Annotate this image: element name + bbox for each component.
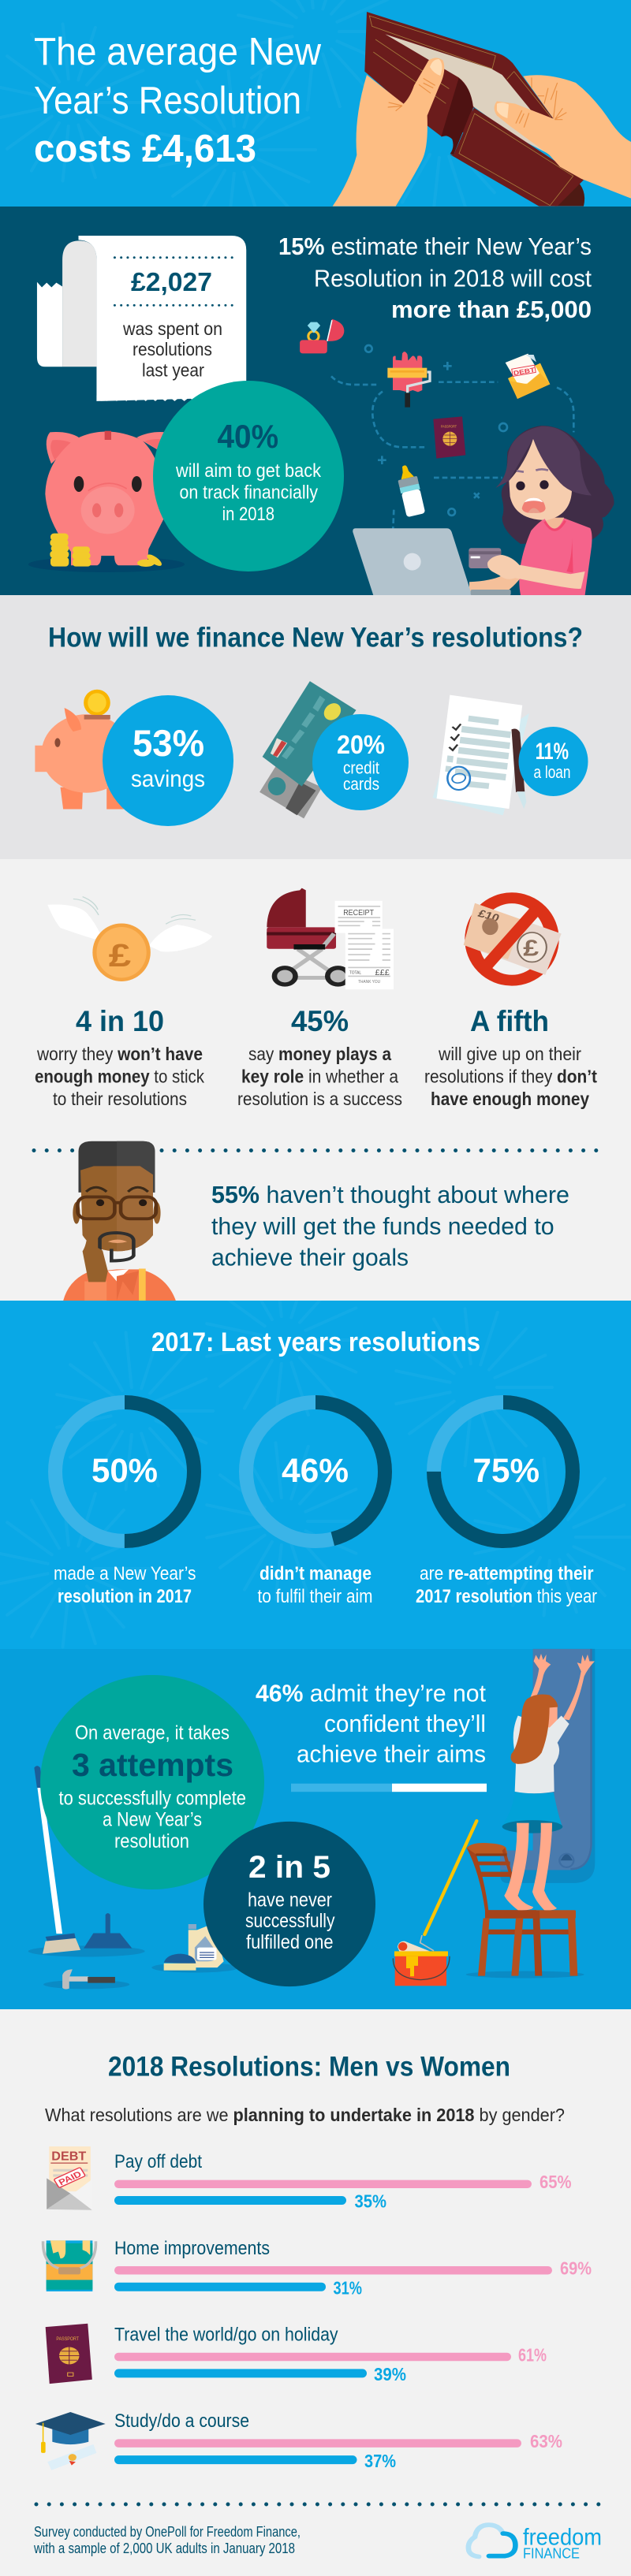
- icon: pram and receipt: £££: [375, 969, 390, 977]
- character: woman on chair hanging wallpaper: [466, 1649, 595, 1978]
- icon: paint roller: [387, 352, 430, 408]
- row: travel: 61%: [518, 2344, 547, 2365]
- callout circle: 2 in 5: have never: [248, 1889, 332, 1912]
- illustration: laptop: [353, 528, 511, 595]
- illustration: broom, dustpan and hammer: [28, 1766, 145, 1990]
- receipt caption: [122, 318, 222, 380]
- callout circle: 3 attempts: resolution: [114, 1830, 189, 1852]
- statistic: 4 in 10: worry they won’t have: [36, 1044, 203, 1064]
- statistic: 4 in 10: 4 in 10: [76, 1005, 164, 1037]
- callout circle: 3 attempts: 3 attempts: [72, 1747, 233, 1783]
- title: The average New: [34, 31, 322, 73]
- statistic: a fifth: have enough money: [431, 1089, 589, 1109]
- panel: attempts and confidence: [0, 1649, 631, 2009]
- statistic: 15% estimate: 15% estimate their New Year’s: [278, 233, 592, 260]
- caption: made a resolution: [54, 1563, 196, 1607]
- callout circle: 11% a loan: 11%: [536, 739, 569, 765]
- icon: no money sign: £: [523, 936, 539, 960]
- statistic: 45%: say money plays a: [248, 1044, 391, 1064]
- icon: no money sign: [464, 898, 562, 981]
- panel: money worries: [0, 859, 631, 1301]
- row: home improvements: [43, 2238, 592, 2298]
- statistic: 15% estimate: more than £5,000: [391, 296, 592, 323]
- statistic: 55% haven't thought about funds: [211, 1181, 569, 1271]
- statistic: 4 in 10: [35, 1005, 204, 1109]
- icon: credit cards: [259, 681, 357, 818]
- statistic: 46% not confident: [256, 1679, 486, 1768]
- statistic: 15% estimate: Resolution in 2018 will cost: [314, 265, 592, 292]
- icon: orange piggy bank with coin: [35, 690, 132, 810]
- icon: baby bottle: [395, 463, 426, 517]
- title: costs £4,613: [34, 128, 256, 170]
- statistic: 45%: resolution is a success: [237, 1089, 402, 1109]
- callout circle: 11% a loan: a loan: [533, 762, 571, 782]
- logo: Freedom Finance: freedom: [523, 2524, 602, 2551]
- source note: with a sample of 2,000 UK adults in January 2018: [33, 2541, 295, 2556]
- title: Year’s Resolution: [34, 80, 301, 122]
- callout circle: 20% credit cards: credit: [343, 758, 379, 778]
- icon: debt letter: DEBT: [513, 367, 536, 377]
- callout circle: 40%: [153, 381, 344, 571]
- icon: loan document and pen: [432, 695, 529, 815]
- callout circle: 3 attempts: [40, 1675, 264, 1889]
- icon: passport: [46, 2324, 92, 2384]
- panel: hero header: [0, 0, 631, 228]
- illustration: receipt: [37, 236, 246, 401]
- icon: passport: PASSPORT: [441, 425, 457, 429]
- donut chart: 75%: [434, 1402, 573, 1541]
- row: study: 63%: [530, 2431, 562, 2451]
- callout circle: 2 in 5: 2 in 5: [248, 1850, 330, 1885]
- icon: pram and receipt: [267, 888, 394, 989]
- source note: Survey conducted by OnePoll for Freedom Finance,: [34, 2524, 301, 2540]
- row: home improvements: Home improvements: [114, 2238, 270, 2259]
- illustration: hands holding an empty wallet: [333, 12, 631, 207]
- callout circle: 2 in 5: [203, 1822, 375, 1986]
- caption: made a resolution: resolution in 2017: [58, 1586, 192, 1607]
- donut chart: 75%: 75%: [473, 1452, 540, 1490]
- icon: debt paid envelope: [47, 2146, 92, 2210]
- icon: no money sign: £10: [476, 908, 501, 925]
- panel: men vs women: [0, 2009, 631, 2576]
- statistic: 55% haven't thought about funds: they will get the funds needed to: [211, 1212, 554, 1240]
- row: study: Study/do a course: [114, 2410, 249, 2432]
- callout circle: 3 attempts: On average, it takes: [75, 1722, 230, 1744]
- panel: 2017 last year's resolutions: [0, 1262, 631, 1649]
- callout circle: 20% credit cards: 20%: [337, 730, 385, 759]
- illustration: pink piggy bank with coins: [28, 431, 185, 572]
- logo: Freedom Finance: [469, 2524, 602, 2562]
- caption: didn't manage: didn’t manage: [259, 1563, 372, 1584]
- icon: debt paid envelope: PAID: [58, 2170, 84, 2187]
- callout circle: 3 attempts: a New Year’s: [103, 1809, 202, 1831]
- statistic: a fifth: A fifth: [470, 1005, 549, 1037]
- icon: ring box: [300, 319, 344, 353]
- statistic: a fifth: resolutions if they don’t: [424, 1066, 597, 1086]
- illustration: cleaning bottle and brush: [151, 1923, 239, 1973]
- receipt figure: £2,027: [131, 267, 212, 296]
- caption: made a resolution: made a New Year’s: [54, 1563, 196, 1584]
- row: travel: Travel the world/go on holiday: [114, 2325, 338, 2346]
- callout circle: 20% credit cards: [312, 714, 409, 810]
- donut chart: 46%: [246, 1402, 385, 1541]
- statistic: 55% haven't thought about funds: achieve their goals: [211, 1244, 409, 1271]
- illustration: paint pot and roller: [393, 1821, 476, 1986]
- statistic: 15% estimate: [278, 233, 592, 323]
- callout circle: 53% savings: savings: [131, 766, 205, 792]
- row: study: [35, 2410, 562, 2471]
- title: [34, 31, 322, 170]
- callout circle: 53% savings: [103, 695, 233, 826]
- statistic: 46% not confident: achieve their aims: [297, 1740, 486, 1768]
- donut chart: 50%: 50%: [91, 1452, 158, 1490]
- icon: paint bucket: [43, 2240, 95, 2291]
- caption: didn't manage: to fulfil their aim: [257, 1586, 372, 1607]
- icon: debt paid envelope: DEBT: [51, 2149, 87, 2163]
- row: home improvements: 69%: [560, 2258, 592, 2279]
- source note: [33, 2524, 301, 2556]
- heading: 2017: Last years resolutions: [151, 1327, 480, 1357]
- callout circle: 2 in 5: successfully: [245, 1910, 335, 1932]
- callout circle: 40%: 40%: [218, 418, 278, 455]
- panel: spending on resolutions: [0, 207, 631, 595]
- caption: re-attempting: are re-attempting their: [420, 1563, 593, 1584]
- subheading: What resolutions are we planning to undertake in 2018 by gender?: [45, 2105, 565, 2125]
- icon: passport: [433, 416, 465, 459]
- statistic: 4 in 10: to their resolutions: [53, 1089, 187, 1109]
- progress bar: 46%: [291, 1784, 487, 1792]
- statistic: 4 in 10: enough money to stick: [35, 1066, 204, 1086]
- icon: flying pound coin: [47, 897, 212, 981]
- statistic: 45%: key role in whether a: [241, 1066, 398, 1086]
- donut chart: 50%: [55, 1402, 194, 1541]
- statistic: 45%: 45%: [291, 1005, 349, 1037]
- statistic: 46% not confident: 46% admit they’re not: [256, 1679, 486, 1707]
- character: shocked woman at a laptop: [469, 426, 614, 595]
- caption: re-attempting: 2017 resolution this year: [416, 1586, 597, 1607]
- icon: graduation cap and diploma: [35, 2412, 106, 2470]
- row: pay off debt: 65%: [540, 2172, 571, 2192]
- callout circle: 40%: in 2018: [222, 504, 274, 525]
- callout circle: 53% savings: 53%: [133, 722, 204, 764]
- row: travel: [46, 2324, 547, 2384]
- icon: pram and receipt: TOTAL: [349, 971, 362, 975]
- statistic: 45%: [237, 1005, 402, 1109]
- row: pay off debt: [47, 2146, 571, 2212]
- caption: didn't manage: [257, 1563, 372, 1607]
- dashed connector paths and small marks: [331, 345, 573, 529]
- callout circle: 2 in 5: fulfilled one: [246, 1931, 333, 1953]
- character: thoughtful man with glasses: [63, 1141, 176, 1301]
- statistic: a fifth: [424, 1005, 597, 1109]
- statistic: 55% haven't thought about funds: 55% haven’t thought about where: [211, 1181, 569, 1208]
- panel: how we finance resolutions: [0, 595, 631, 859]
- icon: debt letter: [506, 354, 550, 399]
- statistic: a fifth: will give up on their: [438, 1044, 581, 1064]
- heading: How will we finance New Year’s resolutions?: [48, 622, 583, 653]
- heading: 2018 Resolutions: Men vs Women: [108, 2051, 510, 2083]
- icon: pram and receipt: THANK YOU: [358, 980, 380, 985]
- row: pay off debt: 35%: [355, 2191, 386, 2212]
- receipt caption: last year: [142, 359, 204, 380]
- icon: flying pound coin: £: [109, 937, 131, 973]
- callout circle: 20% credit cards: cards: [343, 774, 379, 794]
- row: study: 37%: [364, 2451, 396, 2471]
- callout circle: 11% a loan: [519, 727, 588, 796]
- logo: Freedom Finance: FINANCE: [523, 2546, 580, 2562]
- donut chart: 46%: 46%: [282, 1452, 349, 1490]
- row: pay off debt: Pay off debt: [114, 2151, 202, 2172]
- statistic: 46% not confident: confident they’ll: [324, 1710, 486, 1737]
- receipt caption: was spent on: [122, 318, 222, 339]
- caption: re-attempting: [416, 1563, 597, 1607]
- callout circle: 40%: will aim to get back: [175, 460, 322, 482]
- callout circle: 40%: on track financially: [180, 482, 318, 503]
- receipt caption: resolutions: [133, 339, 212, 359]
- callout circle: 3 attempts: to successfully complete: [58, 1788, 246, 1810]
- icon: pram and receipt: RECEIPT: [343, 909, 374, 918]
- icon: passport: PASSPORT: [56, 2336, 79, 2342]
- row: travel: 39%: [374, 2364, 406, 2384]
- row: home improvements: 31%: [333, 2277, 362, 2298]
